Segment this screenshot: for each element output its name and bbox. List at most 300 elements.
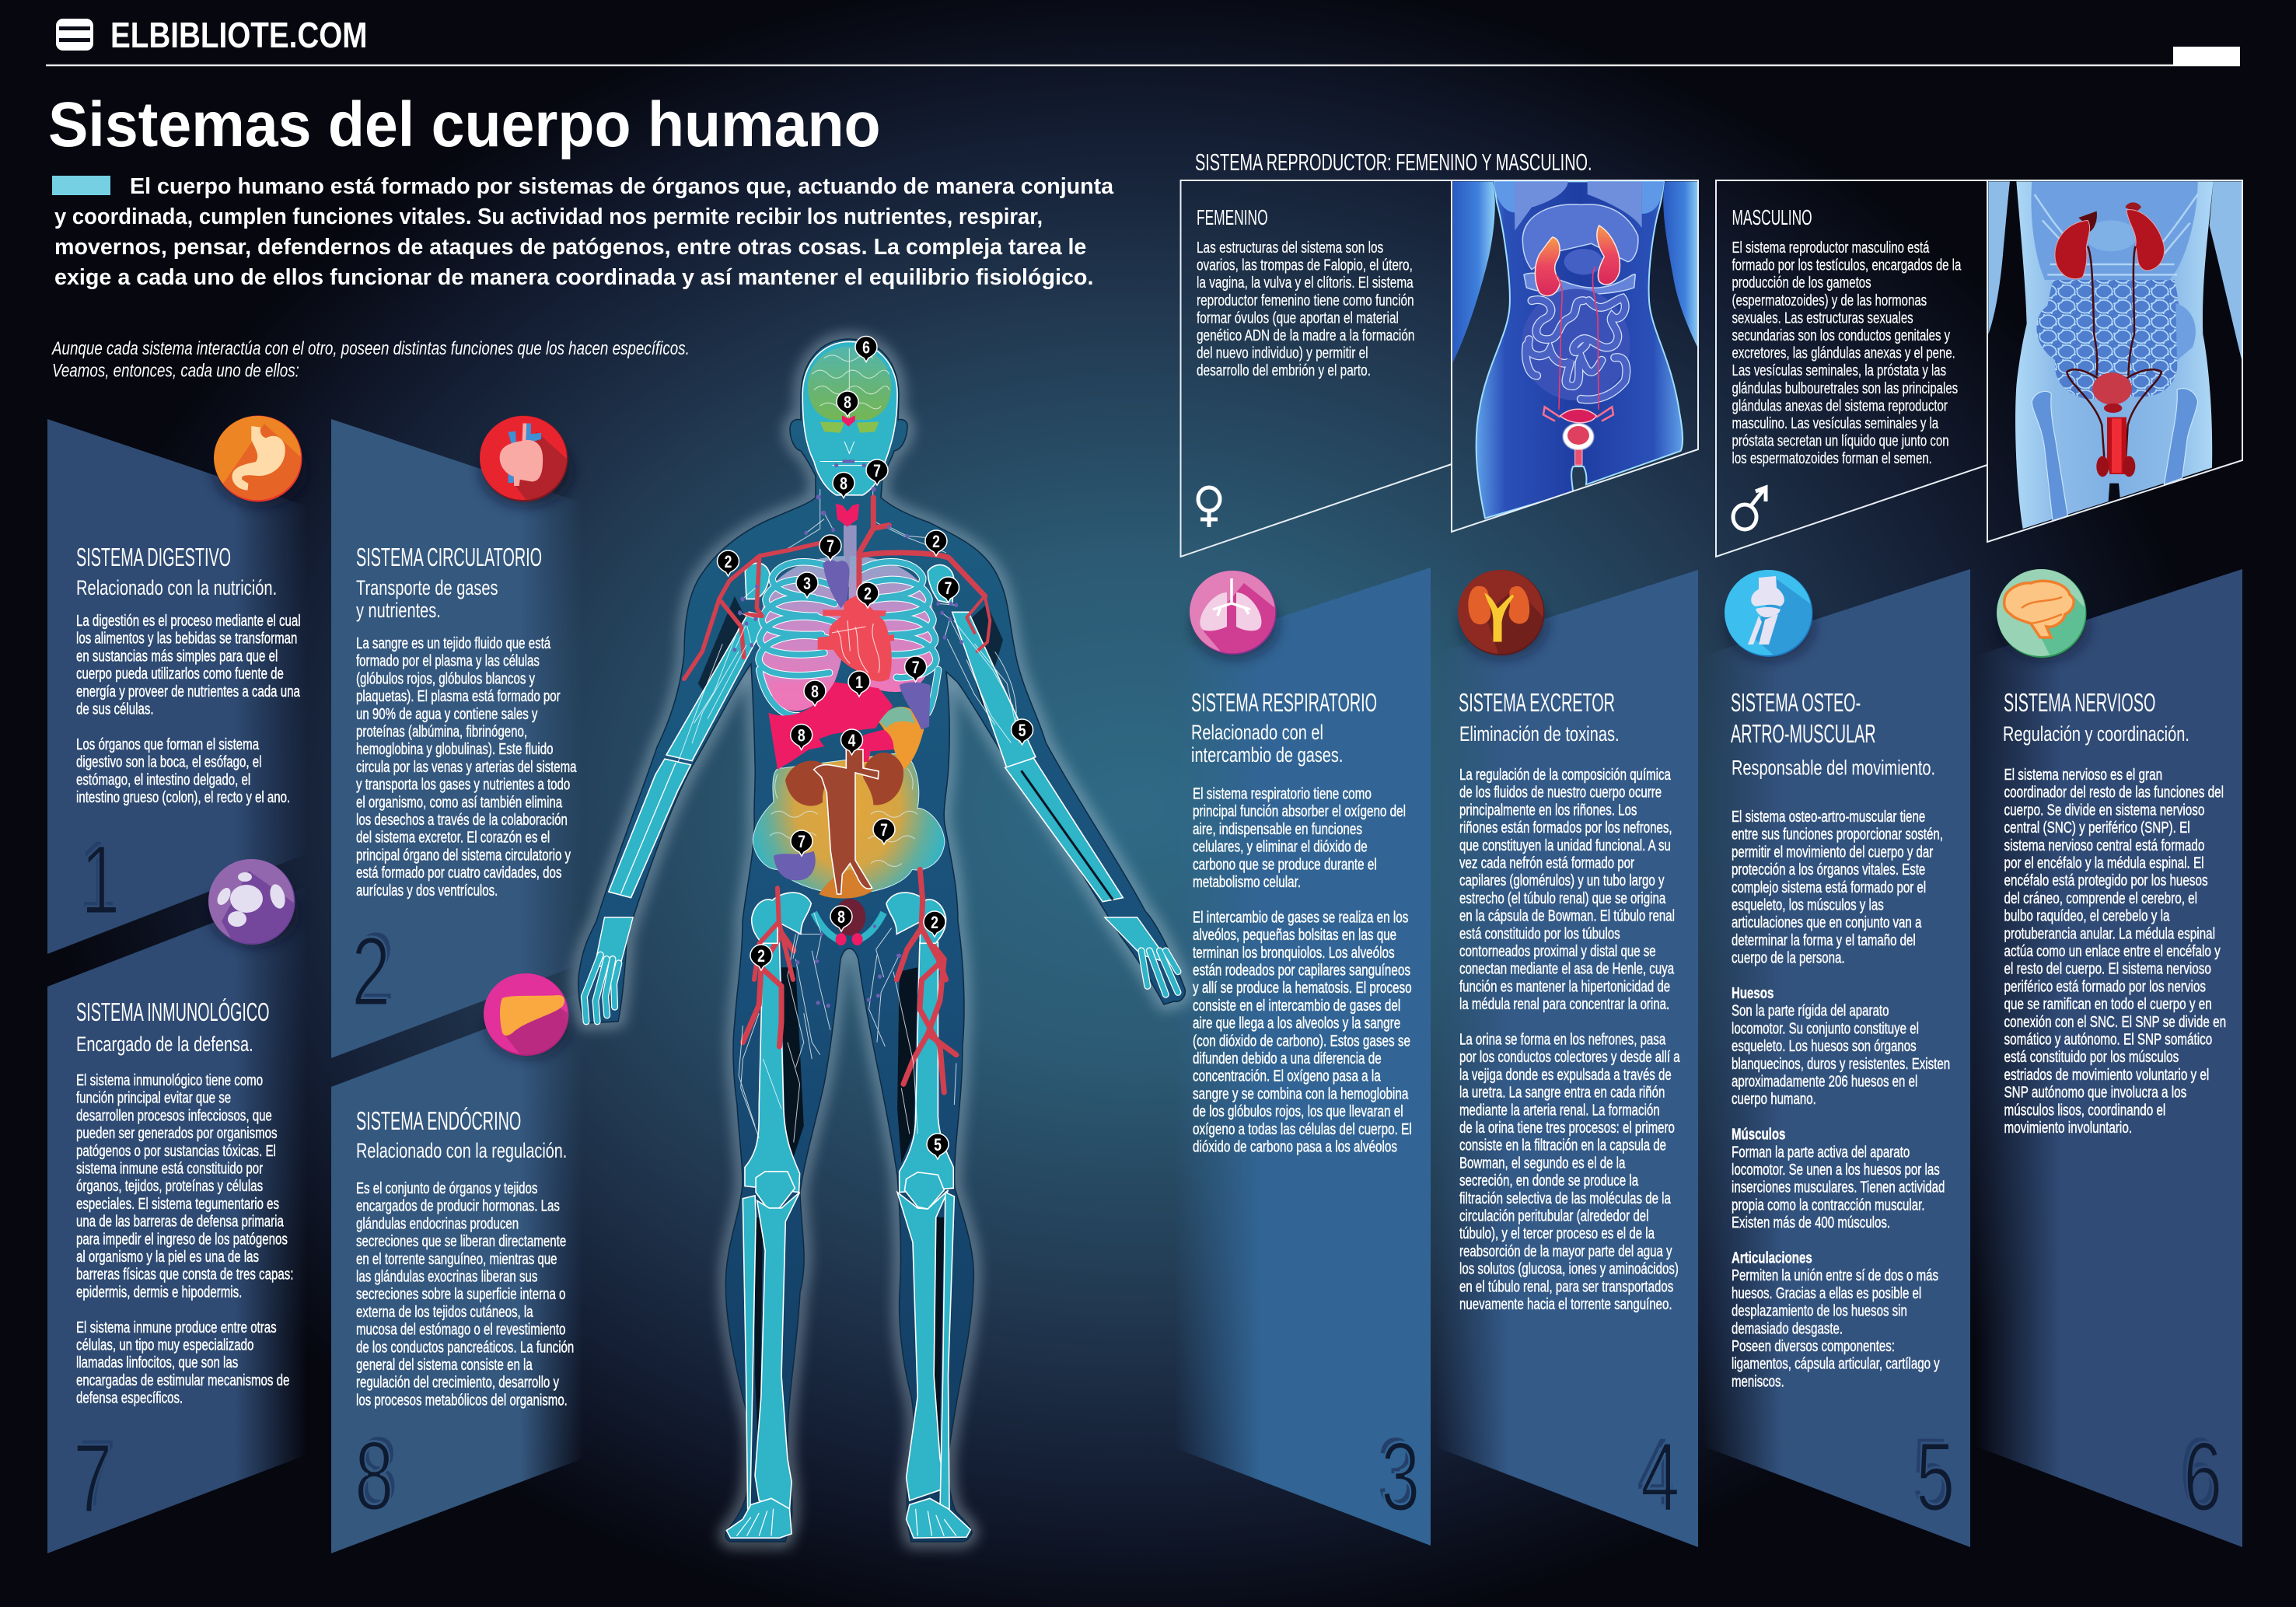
lymph nodes and nerves bbox=[692, 511, 1013, 977]
section heading: reproductor: SISTEMA REPRODUCTOR: FEMENINO Y MASCULINO. bbox=[1195, 148, 1592, 176]
marker 8 bbox=[833, 473, 854, 498]
icon: liver bbox=[484, 973, 575, 1065]
right hand bbox=[1105, 917, 1178, 994]
body text: articulaciones que en conjunto van a bbox=[1732, 914, 1921, 931]
body text: Forman la parte activa del aparato bbox=[1732, 1143, 1910, 1161]
heading: SISTEMA CIRCULATORIO bbox=[356, 543, 542, 571]
body text: ovarios, las trompas de Falopio, el útero, bbox=[1197, 257, 1413, 274]
body text: El sistema osteo-artro-muscular tiene bbox=[1732, 808, 1925, 826]
body text: nuevamente hacia el torrente sanguíneo. bbox=[1459, 1295, 1672, 1313]
body text: conexión con el SNC. El SNP se divide en bbox=[2004, 1013, 2226, 1030]
marker 7: 7 bbox=[873, 462, 881, 481]
number 2: 2 bbox=[351, 918, 390, 1027]
legs and hands bbox=[584, 917, 1178, 1538]
marker 2 bbox=[750, 945, 772, 970]
body text: el resto del cuerpo. El sistema nervioso bbox=[2004, 960, 2211, 977]
logo: ELBIBLIOTE.COM bbox=[110, 16, 367, 55]
body text: los solutos (glucosa, iones y aminoácidos) bbox=[1459, 1259, 1679, 1277]
body text: energía y proveer de nutrientes a cada una bbox=[76, 683, 300, 700]
number 4: 4 bbox=[1636, 1418, 1675, 1527]
subheading: Responsable del movimiento. bbox=[1732, 756, 1935, 780]
body text: reproductor femenino tiene como función bbox=[1197, 292, 1414, 309]
body text: está formado por cuatro cavidades, dos bbox=[356, 864, 561, 882]
body text: y allí se produce la hematosis. El proceso bbox=[1193, 979, 1412, 997]
marker 2: 2 bbox=[932, 533, 940, 552]
body text: metabolismo celular. bbox=[1193, 873, 1301, 891]
body text: concentración. El oxígeno pasa a la bbox=[1193, 1067, 1382, 1085]
body text: mediante la arteria renal. La formación bbox=[1459, 1101, 1660, 1119]
body text: locomotor. Su conjunto constituye el bbox=[1732, 1019, 1919, 1037]
appendix lymph bbox=[774, 851, 816, 880]
arteries bbox=[743, 930, 956, 1092]
body text: actúa como un enlace entre el encéfalo y bbox=[2004, 942, 2221, 960]
body text: aurículas y dos ventrículos. bbox=[356, 882, 498, 899]
body text: túbulo), y el tercer proceso es el de la bbox=[1459, 1224, 1655, 1242]
heading: SISTEMA RESPIRATORIO bbox=[1191, 688, 1377, 717]
body text: desplazamiento de los huesos sin bbox=[1732, 1301, 1907, 1319]
body text: la uretra. La sangre entra en cada riñón bbox=[1459, 1083, 1665, 1101]
number 1: 1 bbox=[78, 821, 117, 930]
marker 1: 1 bbox=[855, 673, 863, 693]
number 1: 1 bbox=[81, 826, 120, 935]
body text: desarrollo del embrión y el parto. bbox=[1197, 362, 1371, 379]
tibias bbox=[755, 1193, 800, 1509]
body text: El sistema inmunológico tiene como bbox=[76, 1071, 263, 1089]
number 5: 5 bbox=[1911, 1418, 1950, 1527]
body text: de los fluidos de nuestro cuerpo ocurre bbox=[1459, 783, 1662, 801]
body text: órganos, tejidos, proteínas y células bbox=[76, 1177, 263, 1195]
body text: La sangre es un tejido fluido que está bbox=[356, 634, 550, 652]
body text: ligamentos, cápsula articular, cartílago y bbox=[1732, 1354, 1940, 1372]
body text: del nuevo individuo) y permitir el bbox=[1197, 344, 1368, 362]
marker 7 bbox=[866, 459, 888, 485]
body text: mucosa del estómago o el revestimiento bbox=[356, 1320, 565, 1338]
marker 2: 2 bbox=[725, 553, 732, 572]
head and arms bbox=[609, 341, 1123, 902]
marker 3 bbox=[796, 572, 818, 598]
body text: genético ADN de la madre a la formación bbox=[1197, 327, 1414, 344]
marker 7: 7 bbox=[945, 579, 952, 599]
body text: periférico está formado por los nervios bbox=[2004, 977, 2206, 995]
icon: heart bbox=[480, 415, 575, 513]
italic lead-in: Veamos, entonces, cada uno de ellos: bbox=[52, 359, 299, 381]
body text: El sistema reproductor masculino está bbox=[1732, 239, 1930, 257]
body text: filtración selectiva de las moléculas de la bbox=[1459, 1190, 1671, 1207]
marker 3: 3 bbox=[803, 575, 811, 594]
body text: dióxido de carbono pasa a los alvéolos bbox=[1193, 1137, 1397, 1155]
body text: de los glóbulos rojos, los que llevaran el bbox=[1193, 1102, 1403, 1120]
heading: ARTRO-MUSCULAR bbox=[1731, 719, 1876, 748]
body text: principal órgano del sistema circulatorio y bbox=[356, 846, 571, 864]
marker 8: 8 bbox=[798, 727, 806, 746]
marker 7: 7 bbox=[798, 833, 806, 852]
heading: SISTEMA OSTEO- bbox=[1731, 688, 1861, 717]
icon: kidneys bbox=[1458, 570, 1547, 661]
body text: músculos lisos, coordinando el bbox=[2004, 1101, 2165, 1119]
subheading: Relacionado con la regulación. bbox=[356, 1140, 567, 1163]
body text: Huesos bbox=[1732, 984, 1774, 1002]
feet bbox=[726, 1498, 970, 1538]
body text: La regulación de la composición química bbox=[1459, 766, 1671, 784]
panel: endocrino bbox=[331, 992, 583, 1553]
marker 2 bbox=[717, 550, 739, 576]
body text: epidermis, dermis e hipodermis. bbox=[76, 1283, 242, 1301]
subheading: Eliminación de toxinas. bbox=[1459, 722, 1620, 746]
body text: plaquetas). El plasma está formado por bbox=[356, 687, 561, 705]
number 6: 6 bbox=[2183, 1424, 2222, 1532]
arm bones bbox=[609, 612, 1123, 902]
trachea and thyroid bbox=[836, 504, 859, 587]
icon: immune cell bbox=[208, 859, 303, 956]
body text: secreciones sobre la superficie interna o bbox=[356, 1285, 565, 1303]
fibulas bbox=[743, 1196, 756, 1509]
body text: estriados de movimiento voluntario y el bbox=[2004, 1066, 2209, 1083]
body text: de la orina tiene tres procesos: el primero bbox=[1459, 1119, 1675, 1137]
lungs bbox=[760, 556, 935, 711]
number 5: 5 bbox=[1916, 1424, 1955, 1532]
spleen bbox=[900, 682, 931, 730]
panel: circulatorio bbox=[331, 419, 583, 1058]
body text: celulares, y eliminar el dióxido de bbox=[1193, 837, 1368, 855]
heading: FEMENINO bbox=[1197, 205, 1268, 229]
body text: próstata secretan un líquido que junto con bbox=[1732, 431, 1949, 449]
marker 4 bbox=[841, 729, 863, 755]
liver bbox=[768, 682, 893, 770]
body text: glándulas endocrinas producen bbox=[356, 1214, 519, 1232]
body text: está constituido por los músculos bbox=[2004, 1048, 2179, 1066]
body text: cuerpo pueda utilizarlos como fuente de bbox=[76, 665, 284, 683]
body text: Bowman, el segundo es el de la bbox=[1459, 1154, 1625, 1172]
body text: proteínas (albúmina, fibrinógeno, bbox=[356, 722, 527, 740]
heading: SISTEMA ENDÓCRINO bbox=[356, 1106, 521, 1135]
body text: carbono que se produce durante el bbox=[1193, 855, 1377, 873]
marker 6: 6 bbox=[862, 339, 870, 358]
body text: circula por las venas y arterias del sistema bbox=[356, 758, 577, 775]
body text: Poseen diversos componentes: bbox=[1732, 1337, 1895, 1355]
body glow bbox=[578, 339, 1185, 1542]
icon: stomach bbox=[214, 415, 311, 513]
body text: (espermatozoides) y de las hormonas bbox=[1732, 292, 1927, 309]
number 7: 7 bbox=[73, 1425, 112, 1534]
marker 5 bbox=[1012, 719, 1033, 745]
intro text: y coordinada, cumplen funciones vitales. Su actividad nos permite recibir los nutrientes, respirar, bbox=[54, 203, 1043, 229]
shoulder heads bbox=[745, 563, 954, 603]
left hand bbox=[584, 917, 633, 1022]
number 8: 8 bbox=[359, 1417, 398, 1526]
body text: propia como la contracción muscular. bbox=[1732, 1196, 1924, 1214]
italic lead-in: Aunque cada sistema interactúa con el otro, poseen distintas funciones que los hacen específicos. bbox=[51, 337, 690, 359]
body text: las glándulas exocrinas liberan sus bbox=[356, 1267, 537, 1285]
subheading: Transporte de gases bbox=[356, 576, 498, 600]
body text: consiste en el intercambio de gases del bbox=[1193, 997, 1400, 1014]
panel: osteo-artro-muscular bbox=[1703, 569, 1970, 1547]
body text: en sustancias más simples para que el bbox=[76, 647, 278, 665]
heading: MASCULINO bbox=[1732, 205, 1812, 229]
number 8: 8 bbox=[355, 1423, 393, 1532]
body text: circulación peritubular (alrededor del bbox=[1459, 1207, 1648, 1224]
body text: Existen más de 400 músculos. bbox=[1732, 1214, 1890, 1231]
body text: capilares (glomérulos) y un tubo largo y bbox=[1459, 872, 1665, 889]
body text: formado por el plasma y las células bbox=[356, 652, 540, 669]
body text: pueden ser generados por organismos bbox=[76, 1124, 278, 1142]
body text: El sistema inmune produce entre otras bbox=[76, 1319, 277, 1336]
body text: complejo sistema está formado por el bbox=[1732, 879, 1926, 896]
body text: Las vesículas seminales, la próstata y las bbox=[1732, 362, 1946, 379]
body text: estrecho (el túbulo renal) que se origina bbox=[1459, 889, 1665, 907]
marker 6 bbox=[855, 336, 877, 362]
body text: excretores, las glándulas anexas y el pene. bbox=[1732, 344, 1955, 362]
body text: Los órganos que forman el sistema bbox=[76, 735, 259, 753]
body text: Articulaciones bbox=[1732, 1249, 1812, 1266]
body silhouette bbox=[578, 339, 1185, 1542]
body text: (glóbulos rojos, glóbulos blancos y bbox=[356, 669, 535, 687]
body text: determinar la forma y el tamaño del bbox=[1732, 931, 1916, 948]
marker 4: 4 bbox=[848, 732, 855, 751]
body text: cuerpo. Se divide en sistema nervioso bbox=[2004, 801, 2204, 819]
body text: cuerpo humano. bbox=[1732, 1090, 1816, 1108]
thymus bbox=[823, 560, 850, 608]
body text: el organismo, como así también elimina bbox=[356, 793, 562, 811]
number 6: 6 bbox=[2179, 1418, 2217, 1527]
body text: Son la parte rígida del aparato bbox=[1732, 1001, 1889, 1019]
body text: los alimentos y las bebidas se transforman bbox=[76, 629, 297, 647]
body text: formado por los testículos, encargados de la bbox=[1732, 256, 1961, 274]
number 3: 3 bbox=[1376, 1418, 1415, 1527]
marker 8: 8 bbox=[811, 683, 819, 702]
icon: bone joint bbox=[1725, 570, 1819, 661]
body text: del sistema excretor. El corazón es el bbox=[356, 828, 550, 846]
body text: El sistema respiratorio tiene como bbox=[1193, 784, 1372, 802]
body text: llamadas linfocitos, que son las bbox=[76, 1354, 238, 1371]
number 4: 4 bbox=[1641, 1424, 1679, 1532]
body text: sistema inmune está constituido por bbox=[76, 1159, 263, 1177]
body text: Las estructuras del sistema son los bbox=[1197, 239, 1383, 256]
kidneys bbox=[785, 753, 903, 806]
marker 7: 7 bbox=[826, 537, 834, 557]
marker 2: 2 bbox=[757, 947, 765, 966]
number 7: 7 bbox=[78, 1420, 117, 1528]
ribs bbox=[759, 562, 938, 716]
body text: y transporta los gases y nutrientes a todo bbox=[356, 775, 570, 793]
markers bbox=[717, 336, 1033, 1159]
body text: esqueleto. Los huesos son órganos bbox=[1732, 1037, 1917, 1055]
nerves and lymph bbox=[739, 930, 956, 1142]
frame outline bbox=[1716, 180, 2242, 557]
body text: producción de los gametos bbox=[1732, 274, 1871, 292]
panel: excretor bbox=[1435, 570, 1698, 1547]
body text: difunden debido a una diferencia de bbox=[1193, 1050, 1382, 1067]
lung lower overlay bbox=[772, 682, 834, 711]
number 3: 3 bbox=[1381, 1424, 1420, 1532]
panel: respiratorio bbox=[1174, 568, 1431, 1546]
body text: blanquecinos, duros y resistentes. Existen bbox=[1732, 1055, 1950, 1072]
marker 8: 8 bbox=[844, 393, 851, 413]
body text: La digestión es el proceso mediante el cual bbox=[76, 612, 301, 630]
subheading: Relacionado con el bbox=[1191, 721, 1323, 745]
pancreas bbox=[791, 730, 893, 762]
intro text: movernos, pensar, defendernos de ataques de patógenos, entre otras cosas. La compleja tarea le bbox=[54, 235, 1086, 260]
body text: encargadas de estimular mecanismos de bbox=[76, 1371, 289, 1389]
skull bbox=[802, 341, 897, 495]
body text: la vejiga donde es expulsada a través de bbox=[1459, 1066, 1672, 1083]
marker 2 bbox=[925, 530, 947, 556]
body text: esqueleto, los músculos y las bbox=[1732, 896, 1884, 914]
title: Sistemas del cuerpo humano bbox=[48, 89, 881, 160]
body text: sexuales. Las estructuras sexuales bbox=[1732, 309, 1913, 327]
marker 7 bbox=[905, 656, 927, 682]
panel: masculino bbox=[1716, 180, 2242, 557]
body text: cuerpo de la persona. bbox=[1732, 948, 1845, 966]
body text: en la cápsula de Bowman. El túbulo renal bbox=[1459, 907, 1675, 924]
body text: por el encéfalo y la médula espinal. El bbox=[2004, 854, 2204, 872]
subheading: Regulación y coordinación. bbox=[2003, 722, 2189, 746]
body text: oxígeno a todas las células del cuerpo. El bbox=[1193, 1120, 1412, 1137]
body text: principal función absorber el oxígeno del bbox=[1193, 802, 1406, 820]
body text: la médula renal para concentrar la orina. bbox=[1459, 995, 1669, 1013]
panel: inmunologico bbox=[47, 886, 307, 1553]
body text: contorneados proximal y distal que se bbox=[1459, 942, 1656, 960]
number 2: 2 bbox=[356, 913, 395, 1022]
brain bbox=[808, 347, 891, 466]
marker 2: 2 bbox=[864, 585, 872, 604]
body text: riñones están formados por los nefrones, bbox=[1459, 819, 1672, 837]
body text: meniscos. bbox=[1732, 1372, 1784, 1390]
marker 8: 8 bbox=[837, 908, 845, 928]
marker 7 bbox=[938, 577, 959, 603]
body text: intestino grueso (colon), el recto y el ano. bbox=[76, 788, 290, 806]
subheading: Encargado de la defensa. bbox=[76, 1032, 253, 1057]
icon: lungs bbox=[1190, 571, 1283, 661]
heading: SISTEMA INMUNOLÓGICO bbox=[76, 997, 270, 1026]
body text: encargados de producir hormonas. Las bbox=[356, 1197, 560, 1214]
body text: huesos. Gracias a ellas es posible el bbox=[1732, 1284, 1921, 1301]
body text: secreción, en donde se produce la bbox=[1459, 1172, 1638, 1190]
femurs bbox=[745, 942, 800, 1193]
marker 7 bbox=[791, 830, 813, 856]
panel: nervioso bbox=[1975, 569, 2242, 1547]
body text: alveólos, pequeñas bolsitas en las que bbox=[1193, 926, 1396, 944]
body text: regulación del crecimiento, desarrollo y bbox=[356, 1373, 559, 1391]
body text: que constituyen la unidad funcional. A su bbox=[1459, 837, 1671, 854]
marker 7 bbox=[873, 819, 895, 844]
body text: (con dióxido de carbono). Estos gases se bbox=[1193, 1032, 1410, 1050]
body text: entre sus funciones proporcionar sostén, bbox=[1732, 825, 1943, 843]
marker 2 bbox=[924, 911, 945, 937]
body text: encéfalo está protegido por los huesos bbox=[2004, 872, 2208, 889]
body text: aproximadamente 206 huesos en el bbox=[1732, 1072, 1917, 1090]
pelvis bbox=[752, 893, 946, 945]
arteries bbox=[684, 498, 990, 980]
panel: femenino bbox=[1180, 180, 1699, 557]
body text: una de las barreras de defensa primaria bbox=[76, 1212, 284, 1230]
icon: male symbol bbox=[1733, 487, 1766, 529]
body text: locomotor. Se unen a los huesos por las bbox=[1732, 1161, 1940, 1179]
marker 8 bbox=[830, 906, 852, 931]
body text: glándulas anexas del sistema reproductor bbox=[1732, 397, 1948, 414]
neck lymph bbox=[788, 463, 946, 553]
body text: sangre y se combina con la hemoglobina bbox=[1193, 1085, 1409, 1102]
body text: función es mantener la hipertonicidad de bbox=[1459, 977, 1670, 995]
marker 5 bbox=[927, 1134, 949, 1159]
body text: inserciones musculares. Tienen actividad bbox=[1732, 1178, 1945, 1196]
subheading: intercambio de gases. bbox=[1191, 743, 1343, 767]
marker 2: 2 bbox=[931, 914, 938, 933]
body text: especiales. El sistema tegumentario es bbox=[76, 1195, 279, 1212]
body text: reabsorción de la mayor parte del agua y bbox=[1459, 1242, 1672, 1259]
body text: al organismo y la piel es una de las bbox=[76, 1248, 259, 1266]
body text: los espermatozoides forman el semen. bbox=[1732, 449, 1932, 467]
torso organs bbox=[684, 498, 1013, 980]
body text: por los conductos colectores y desde allí a bbox=[1459, 1048, 1680, 1066]
body text: demasiado desgaste. bbox=[1732, 1319, 1843, 1337]
marker 8 bbox=[804, 680, 826, 706]
body text: coordinador del resto de las funciones del bbox=[2004, 784, 2224, 801]
body text: sistema nervioso central está formado bbox=[2004, 837, 2204, 854]
body text: somático y autónomo. El SNP somático bbox=[2004, 1030, 2212, 1048]
icon: brain bbox=[1997, 569, 2092, 661]
leg muscle shadows bbox=[755, 967, 944, 1484]
heading: SISTEMA DIGESTIVO bbox=[76, 543, 231, 571]
body text: de los conductos pancreáticos. La función bbox=[356, 1338, 574, 1356]
body text: en el torrente sanguíneo, mientras que bbox=[356, 1250, 557, 1267]
body text: La orina se forma en los nefrones, pasa bbox=[1459, 1030, 1665, 1048]
marker 7 bbox=[820, 535, 841, 561]
body text: barreras físicas que consta de tres capas: bbox=[76, 1265, 293, 1283]
body text: secreciones que se liberan directamente bbox=[356, 1232, 566, 1250]
body text: externa de los tejidos cutáneos, la bbox=[356, 1303, 533, 1320]
body text: terminan los bronquiolos. Los alveólos bbox=[1193, 944, 1395, 961]
intestines bbox=[753, 753, 945, 894]
heading: SISTEMA NERVIOSO bbox=[2004, 688, 2155, 717]
body text: Músculos bbox=[1732, 1125, 1785, 1143]
body text: digestivo son la boca, el esófago, el bbox=[76, 753, 261, 770]
intro text: El cuerpo humano está formado por sistemas de órganos que, actuando de manera conjunta bbox=[130, 174, 1114, 199]
image: male anatomy bbox=[1988, 181, 2242, 529]
body text: El sistema nervioso es el gran bbox=[2004, 766, 2162, 784]
marker 8 bbox=[791, 725, 813, 749]
body text: patógenos o por sustancias tóxicas. El bbox=[76, 1142, 276, 1159]
image: female anatomy bbox=[1452, 181, 1699, 519]
shadows in shoulders bbox=[698, 596, 1003, 707]
body text: aire, indispensable en funciones bbox=[1193, 820, 1362, 837]
body text: hemoglobina y globulinas). Este fluido bbox=[356, 740, 554, 758]
body text: de sus células. bbox=[76, 700, 154, 718]
heart bbox=[818, 596, 894, 681]
figure: human body bbox=[578, 336, 1185, 1542]
icon: female symbol bbox=[1198, 487, 1220, 527]
body text: SNP autónomo que involucra a los bbox=[2004, 1083, 2186, 1101]
marker 2 bbox=[857, 582, 879, 608]
knee caps bbox=[756, 1172, 944, 1209]
body text: defensa específicos. bbox=[76, 1389, 183, 1406]
body text: células, un tipo muy especializado bbox=[76, 1336, 253, 1354]
body text: protuberancia anular. La médula espinal bbox=[2004, 924, 2215, 942]
heading: SISTEMA EXCRETOR bbox=[1459, 688, 1615, 717]
marker 5: 5 bbox=[1019, 721, 1026, 741]
body text: masculino. Las vesículas seminales y la bbox=[1732, 414, 1938, 432]
marker 8: 8 bbox=[840, 475, 847, 494]
body text: un 90% de agua y contiene sales y bbox=[356, 705, 537, 722]
body text: los procesos metabólicos del organismo. bbox=[356, 1391, 568, 1409]
marker 5: 5 bbox=[934, 1136, 942, 1155]
body text: Es el conjunto de órganos y tejidos bbox=[356, 1179, 537, 1197]
panel: digestivo bbox=[47, 419, 307, 954]
body text: del cráneo, comprende el cerebro, el bbox=[2004, 889, 2197, 907]
body text: están rodeados por capilares sanguíneos bbox=[1193, 961, 1410, 979]
body text: consiste en la filtración en la capsula de bbox=[1459, 1136, 1666, 1154]
body text: vez cada nefrón está formado por bbox=[1459, 854, 1634, 872]
intro text bbox=[52, 174, 1114, 290]
